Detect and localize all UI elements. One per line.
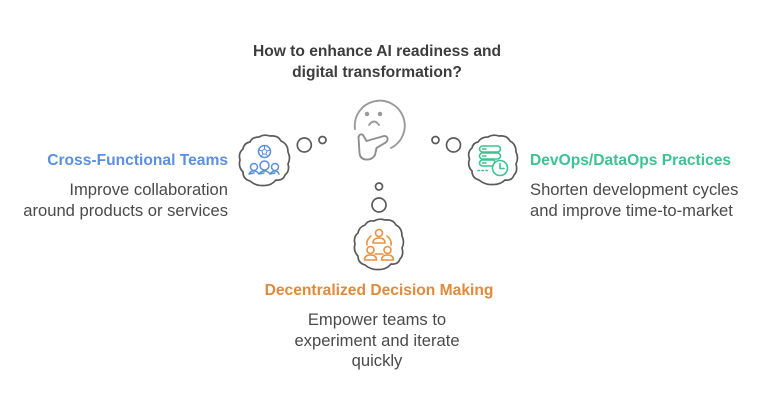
right description: and improve time-to-market — [530, 201, 733, 220]
title: How to enhance AI readiness and — [253, 43, 501, 60]
thought bubbles: left — [297, 136, 326, 152]
left description — [23, 180, 228, 220]
title: digital transformation? — [292, 64, 462, 81]
right description — [530, 180, 738, 220]
left heading: Cross-Functional Teams — [47, 152, 228, 169]
left description: Improve collaboration — [69, 180, 228, 199]
right description: Shorten development cycles — [530, 180, 738, 199]
bottom description: experiment and iterate — [294, 331, 460, 350]
thought bubbles: bottom — [372, 183, 386, 212]
thought cloud: left — [239, 135, 290, 186]
icon: connected people — [364, 230, 394, 260]
icon: thinking face — [355, 101, 405, 160]
bottom heading: Decentralized Decision Making — [265, 282, 493, 299]
title — [253, 43, 501, 81]
right heading: DevOps/DataOps Practices — [530, 152, 731, 169]
thought bubbles: right — [432, 136, 460, 152]
icon: team — [249, 146, 279, 174]
left description: around products or services — [23, 201, 228, 220]
icon: server and clock — [478, 146, 508, 176]
thought cloud: right — [469, 135, 518, 185]
bottom description: Empower teams to — [308, 310, 446, 329]
bottom description: quickly — [352, 351, 402, 370]
bottom description — [294, 310, 460, 370]
thought cloud: bottom — [354, 219, 404, 270]
